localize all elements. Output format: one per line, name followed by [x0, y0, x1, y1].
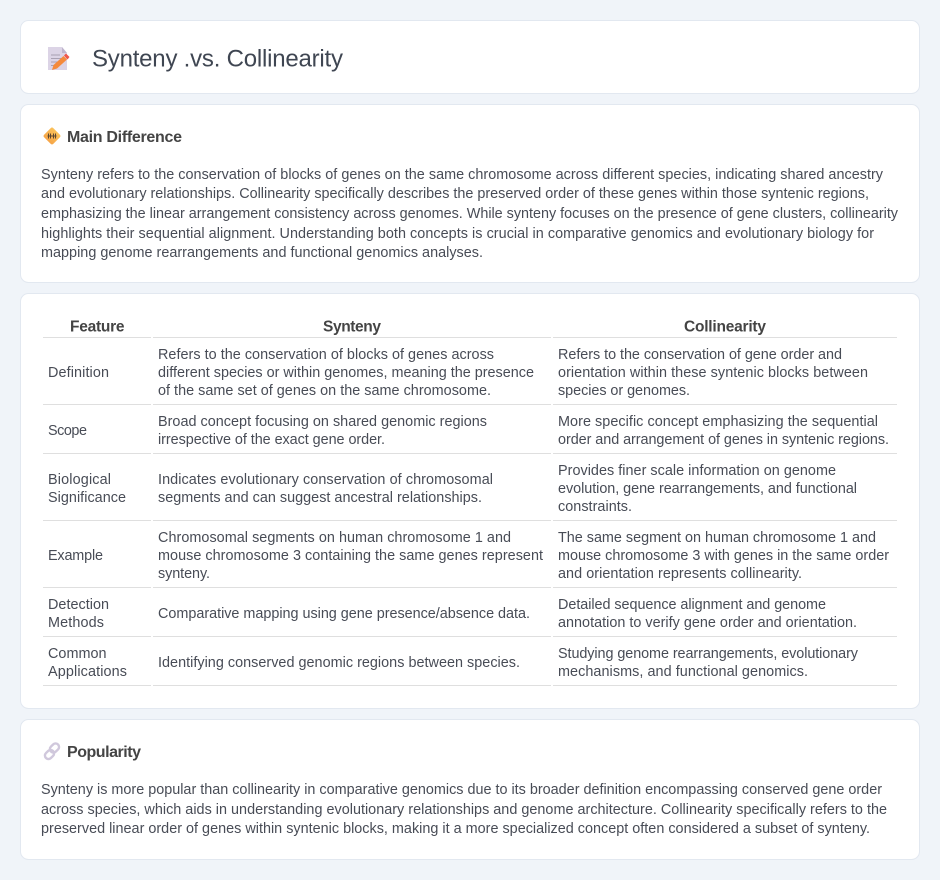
icon: chain link [43, 742, 61, 761]
text block: popularity paragraph: Synteny is more popular than collinearity in comparative genomics due to its broader definition encompassing conserved gene order [41, 782, 882, 798]
text block: popularity paragraph: across species, which aids in understanding evolutionary relationships and genome architecture. Collinearity specifically refers to the [41, 802, 887, 818]
row: common applications: mechanisms, and functional genomics. [558, 664, 808, 680]
row: biological significance: Indicates evolutionary conservation of chromosomal [158, 472, 493, 488]
row: common applications: Identifying conserved genomic regions between species. [158, 655, 520, 671]
table header row: Collinearity [684, 318, 766, 336]
text block: main difference paragraph: emphasizing the linear arrangement consistency across genomes. While synteny focuses on the presence of gene clusters, collinearity [41, 206, 899, 222]
row: definition: species or genomes. [558, 383, 690, 399]
table header row [43, 318, 897, 338]
icon: document with pencil [48, 47, 70, 70]
text block: main difference paragraph: and evolutionary relationships. Collinearity specifically describes the preserved order of these genes within those syntenic regions, [41, 186, 869, 202]
row: biological significance: segments and can suggest ancestral relationships. [158, 490, 482, 506]
row: scope: Scope [48, 423, 87, 439]
row: biological significance: evolution, gene rearrangements, and functional [558, 481, 857, 497]
text block: main difference paragraph [41, 167, 899, 261]
text block: popularity paragraph [41, 782, 887, 837]
row: detection methods: Comparative mapping using gene presence/absence data. [158, 606, 530, 622]
row: scope [43, 414, 897, 454]
row: common applications: Common [48, 646, 106, 662]
row: example [43, 530, 897, 588]
row: definition: Definition [48, 365, 109, 381]
row: scope: More specific concept emphasizing the sequential [558, 414, 878, 430]
panel: popularity [20, 720, 920, 860]
row: definition: of the same set of genes on the same chromosome. [158, 383, 491, 399]
row: detection methods: Methods [48, 615, 104, 631]
row: common applications: Studying genome rearrangements, evolutionary [558, 646, 859, 662]
panel: title header [20, 20, 920, 94]
panel: comparison table [20, 294, 920, 708]
row: scope: Broad concept focusing on shared genomic regions [158, 414, 487, 430]
row: common applications: Applications [48, 664, 127, 680]
row: biological significance [43, 463, 897, 521]
row: detection methods: Detection [48, 597, 109, 613]
heading: main difference: Main Difference [67, 129, 182, 146]
row: example: synteny. [158, 566, 210, 582]
row: definition: orientation within these syntenic blocks between [558, 365, 868, 381]
row: example: Chromosomal segments on human chromosome 1 and [158, 530, 511, 546]
row: example: mouse chromosome 3 with genes in the same order [558, 548, 889, 564]
row: biological significance: constraints. [558, 499, 632, 515]
title: Synteny .vs. Collinearity [92, 46, 343, 72]
icon: diamond sign [43, 127, 61, 145]
table header row: Synteny [323, 318, 381, 336]
panel: main difference [20, 104, 920, 282]
row: biological significance: Biological [48, 472, 111, 488]
row: definition: Refers to the conservation of gene order and [558, 347, 842, 363]
text block: main difference paragraph: Synteny refers to the conservation of blocks of genes on the same chromosome across different species, indicating shared ancestry [41, 167, 884, 183]
row: detection methods: annotation to verify gene order and orientation. [558, 615, 857, 631]
row: definition [43, 347, 897, 405]
row: example: The same segment on human chromosome 1 and [558, 530, 876, 546]
row: definition: different species or within genomes, meaning the presence [158, 365, 534, 381]
table header row: Feature [70, 318, 125, 336]
text block: main difference paragraph: mapping genome rearrangements and functional genomics analyses. [41, 245, 483, 261]
heading: popularity: Popularity [67, 744, 141, 761]
row: definition: Refers to the conservation of blocks of genes across [158, 347, 494, 363]
text block: main difference paragraph: highlights their sequential alignment. Understanding both concepts is crucial in comparative genomics and evolutionary biology for [41, 226, 874, 242]
row: detection methods [43, 597, 897, 637]
row: detection methods: Detailed sequence alignment and genome [558, 597, 826, 613]
row: scope: order and arrangement of genes in syntenic regions. [558, 432, 889, 448]
row: common applications [43, 646, 897, 686]
text block: popularity paragraph: preserved linear order of genes within syntenic blocks, making it a more specialized concept often considered a subset of synteny. [41, 821, 870, 837]
row: example: mouse chromosome 3 containing the same genes represent [158, 548, 543, 564]
row: biological significance: Significance [48, 490, 126, 506]
row: example: and orientation represents collinearity. [558, 566, 802, 582]
row: example: Example [48, 548, 103, 564]
row: scope: irrespective of the exact gene order. [158, 432, 385, 448]
row: biological significance: Provides finer scale information on genome [558, 463, 836, 479]
